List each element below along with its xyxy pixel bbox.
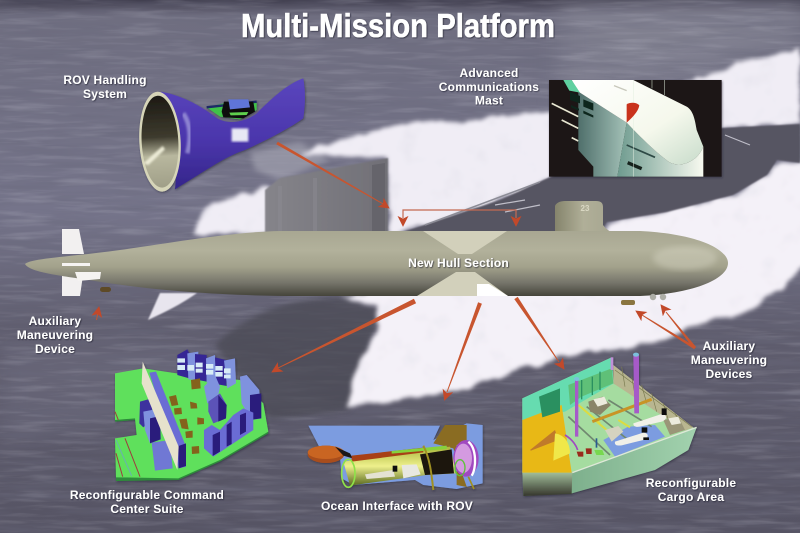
label: Auxiliary Maneuvering Devices: Maneuvering	[691, 353, 767, 367]
panel: ocean interface with ROV	[308, 423, 483, 490]
spray by the sail	[250, 142, 330, 180]
arrow: ocean interface	[444, 302, 482, 400]
label: Advanced Communications Mast: Mast	[475, 94, 503, 108]
label: Auxiliary Maneuvering Devices: Devices	[706, 367, 753, 381]
label: ROV Handling System: ROV Handling	[63, 73, 147, 87]
foam below hull	[340, 160, 800, 408]
tail planes	[62, 263, 101, 281]
label: Reconfigurable Cargo Area: Cargo Area	[658, 490, 724, 504]
arrow: comms mast bracket	[403, 210, 516, 226]
label: Advanced Communications Mast: Advanced	[459, 66, 519, 80]
label: New Hull Section: New Hull Section	[408, 256, 509, 270]
hull number: 23	[581, 204, 590, 213]
foam above hull	[300, 48, 800, 234]
panel: tail fins	[62, 229, 84, 296]
label: ROV Handling System: System	[83, 87, 127, 101]
dark wave lump	[215, 298, 380, 420]
label: Auxiliary Maneuvering Device: Auxiliary	[29, 314, 81, 328]
arrow: command center	[272, 299, 416, 372]
panel: communications mast	[549, 80, 722, 177]
label: Advanced Communications Mast: Communications	[439, 80, 539, 94]
label: Reconfigurable Cargo Area: Reconfigurable	[646, 476, 736, 490]
auxiliary devices under hull	[100, 287, 666, 305]
new hull section	[417, 231, 508, 296]
label: Reconfigurable Command Center Suite: Center Suite	[110, 502, 184, 516]
panel: cargo area	[522, 353, 697, 496]
photographed sail	[265, 158, 388, 233]
label: Reconfigurable Command Center Suite: Reconfigurable Command	[70, 488, 224, 502]
label: Ocean Interface with ROV: Ocean Interface with ROV	[321, 499, 473, 513]
arrow: aux devices right	[636, 305, 696, 349]
panel: ROV handling system	[137, 78, 305, 193]
arrow: cargo area	[514, 297, 564, 369]
arrow: ROV to hull	[276, 142, 389, 208]
submarine hull	[25, 231, 728, 305]
label: Auxiliary Maneuvering Device: Maneuvering	[17, 328, 93, 342]
submarine sail	[555, 201, 612, 232]
title: Multi-Mission Platform	[241, 7, 555, 44]
label: Auxiliary Maneuvering Devices: Auxiliary	[703, 339, 755, 353]
arrow: aux device left	[96, 307, 99, 320]
panel: command center suite	[115, 349, 268, 481]
photographed submarine deck	[400, 124, 800, 233]
label: Auxiliary Maneuvering Device: Device	[35, 342, 75, 356]
